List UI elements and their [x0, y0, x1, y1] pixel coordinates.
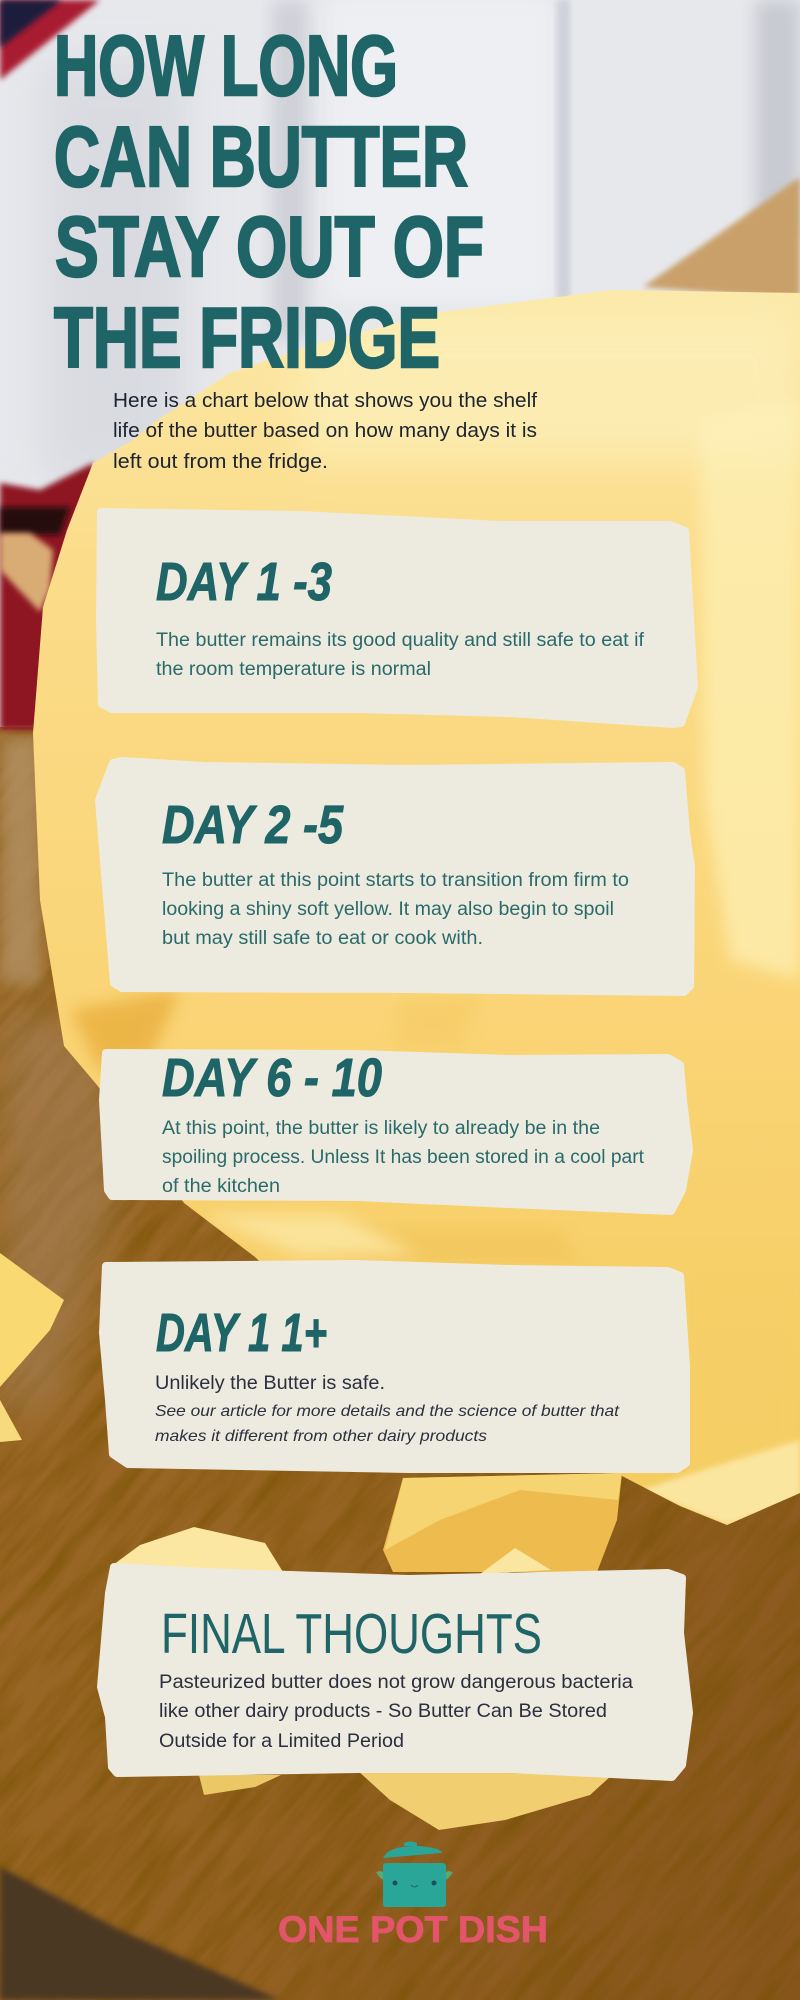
- heading: final thoughts: FINAL THOUGHTS: [161, 1602, 542, 1666]
- note: see our article: See our article for more details and the science of butter that: [155, 1403, 620, 1420]
- body: day 2-5: [162, 870, 629, 949]
- intro text: life of the butter based on how many days it is: [113, 420, 537, 442]
- intro text: left out from the fridge.: [113, 451, 328, 473]
- body: final thoughts: Outside for a Limited Period: [159, 1731, 404, 1752]
- body: final thoughts: [159, 1672, 633, 1752]
- panel: day 6-10: [103, 1048, 689, 1211]
- logo: one pot dish: [278, 1842, 548, 1950]
- icon: pot: [376, 1842, 453, 1907]
- background photo: red cloth: [0, 0, 100, 730]
- title: CAN BUTTER: [54, 110, 468, 205]
- body: day 1-3: [156, 630, 645, 680]
- body: day 6-10: [162, 1118, 645, 1197]
- body: final thoughts: like other dairy products - So Butter Can Be Stored: [159, 1701, 607, 1722]
- panel: final thoughts: [101, 1567, 689, 1777]
- body: final thoughts: Pasteurized butter does not grow dangerous bacteria: [159, 1672, 633, 1693]
- wordmark: ONE POT DISH: [278, 1909, 548, 1950]
- heading: day 6-10: DAY 6 - 10: [162, 1048, 382, 1108]
- title: HOW LONG: [54, 19, 398, 114]
- heading: day 2-5: DAY 2 -5: [162, 795, 344, 855]
- text: unlikely safe: Unlikely the Butter is safe.: [155, 1373, 385, 1394]
- body: day 2-5: looking a shiny soft yellow. It may also begin to spoil: [162, 899, 614, 920]
- title: STAY OUT OF: [55, 200, 484, 295]
- body: day 1-3: the room temperature is normal: [156, 659, 431, 680]
- background photo: white planks: [40, 0, 800, 480]
- intro text: [113, 390, 537, 473]
- body: day 2-5: but may still safe to eat or cook with.: [162, 928, 483, 949]
- title: THE FRIDGE: [54, 291, 440, 386]
- panel: day 11+: [103, 1264, 686, 1469]
- body: day 2-5: The butter at this point starts to transition from firm to: [162, 870, 629, 891]
- panel: day 2-5: [99, 761, 691, 992]
- body: day 1-3: The butter remains its good quality and still safe to eat if: [156, 630, 645, 651]
- note: see our article: makes it different from other dairy products: [155, 1428, 487, 1445]
- intro text: Here is a chart below that shows you the shelf: [113, 390, 537, 412]
- background photo: butter chunks: [0, 1253, 622, 1830]
- background photo: butter block: [33, 290, 800, 1525]
- body: day 6-10: spoiling process. Unless It has been stored in a cool part: [162, 1147, 645, 1168]
- body: day 6-10: of the kitchen: [162, 1176, 280, 1197]
- panel: day 1-3: [100, 512, 694, 724]
- body: day 6-10: At this point, the butter is likely to already be in the: [162, 1118, 600, 1139]
- heading: day 11+: DAY 1 1+: [156, 1303, 327, 1363]
- note: see our article: [155, 1403, 620, 1445]
- heading: day 1-3: DAY 1 -3: [156, 552, 332, 612]
- title: [54, 19, 484, 386]
